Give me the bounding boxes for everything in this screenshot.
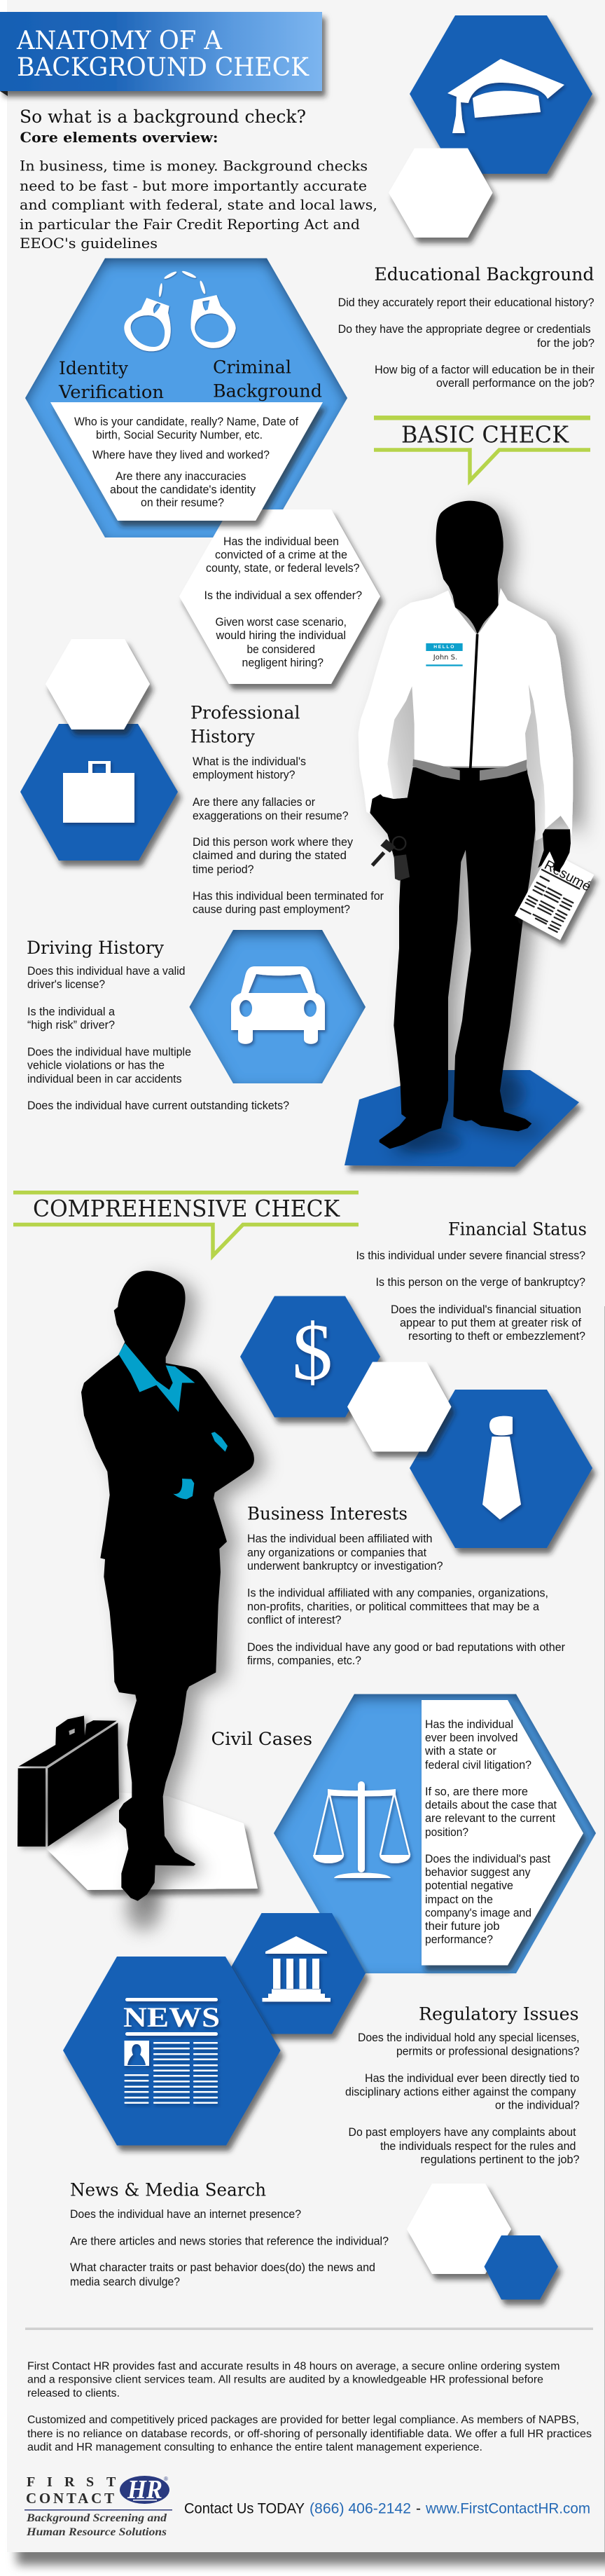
text block: company description: there is no reliance on database records, or off-shoring of personally identifiable data. We offer a full HR practices [27, 2428, 592, 2440]
panel: identity questions: on their resume? [141, 496, 224, 509]
text block: civil cases questions: company's image and [425, 1907, 531, 1919]
text block: civil cases questions: performance? [425, 1933, 493, 1946]
panel: driving history [27, 938, 289, 1112]
panel: civil cases: Civil Cases [211, 1729, 312, 1749]
silhouette body [359, 501, 573, 1149]
blue collar and cuffs [118, 1343, 228, 1499]
text block: company description [27, 2360, 592, 2453]
panel: business interests: Is the individual affiliated with any companies, organizations, [247, 1587, 548, 1599]
panel: business interests: firms, companies, etc.? [247, 1654, 361, 1667]
hand [538, 829, 571, 871]
panel: business interests: non-profits, charities, or political committees that may be a [247, 1601, 540, 1613]
heading: criminal background [213, 357, 322, 401]
contact line [184, 2500, 590, 2517]
text block: company description: and a responsive client services team. All results are audited by a knowledgeable HR professional before [27, 2374, 543, 2385]
contact line: www.FirstContactHR.com [425, 2500, 590, 2517]
text block: civil cases questions [424, 1718, 557, 1946]
intro text block: and compliant with federal, state and local laws, [20, 196, 377, 213]
panel: regulatory issues: or the individual? [495, 2099, 580, 2112]
text block: criminal questions: would hiring the individual [216, 629, 346, 642]
panel: driving history: “high risk” driver? [27, 1019, 115, 1032]
panel: business interests: underwent bankruptcy or investigation? [247, 1560, 443, 1573]
panel: regulatory issues: Do past employers have any complaints about [349, 2126, 576, 2139]
logo: First Contact HR: Human Resource Solutions [26, 2526, 167, 2538]
foot shadow [126, 1889, 161, 1931]
panel: identity questions: about the candidate's identity [110, 484, 256, 496]
hexagon: news [63, 1957, 280, 2146]
panel: identity questions: birth, Social Security Number, etc. [96, 429, 263, 441]
panel: professional history: Has this individual been terminated for [193, 890, 384, 903]
panel: driving history: driver's license? [27, 978, 105, 991]
panel: financial status: Is this individual under severe financial stress? [356, 1249, 585, 1262]
icon: tie [482, 1416, 521, 1519]
title: BACKGROUND CHECK [17, 53, 310, 82]
figure: man silhouette [345, 501, 594, 1167]
panel: business interests: Business Interests [247, 1504, 408, 1523]
name tag: John S. [433, 654, 457, 662]
panel: regulatory issues: permits or professional designations? [396, 2045, 580, 2057]
text block: civil cases questions: potential negative [425, 1879, 513, 1892]
text block: criminal questions: Has the individual been [223, 535, 339, 548]
panel: driving history: vehicle violations or has the [27, 1060, 165, 1072]
floor hexagon [345, 1070, 579, 1167]
heading: identity verification: Verification [58, 382, 164, 402]
panel: driving history: Does this individual have a valid [27, 965, 185, 978]
contact line: Contact Us TODAY [184, 2500, 305, 2517]
panel: identity questions [50, 402, 323, 521]
panel: financial status: appear to put them at greater risk of [400, 1317, 581, 1329]
contact line: (866) 406-2142 [310, 2500, 411, 2517]
panel: driving history: Does the individual have multiple [27, 1046, 191, 1058]
text block: company description: released to clients. [27, 2387, 120, 2399]
intro text block: EEOC's guidelines [20, 235, 158, 252]
panel: financial status [356, 1219, 587, 1343]
floor hexagon white [35, 1785, 258, 1890]
briefcase [18, 1715, 119, 1847]
text block: civil cases questions: their future job [425, 1920, 500, 1933]
intro text block: Core elements overview: [20, 129, 218, 146]
contact line: - [416, 2500, 421, 2517]
panel: driving history: Is the individual a [27, 1006, 116, 1018]
icon: handcuffs [124, 270, 236, 351]
text block: civil cases questions: with a state or [424, 1745, 496, 1758]
icon: scales [313, 1781, 410, 1878]
hexagon: graduation cap [410, 15, 592, 174]
belt [412, 759, 527, 781]
panel: identity questions: Who is your candidate, really? Name, Date of [74, 416, 298, 428]
panel: financial status: Is this person on the verge of bankruptcy? [375, 1276, 585, 1289]
hexagons: white and blue lower right [407, 2184, 558, 2300]
icon: newspaper: NEWS [123, 2001, 220, 2033]
text block: civil cases questions: impact on the [425, 1893, 493, 1906]
text block: company description: Customized and competitively priced packages are provided for better legal compliance. As members of NAPBS, [27, 2414, 579, 2426]
resume sheet [515, 851, 594, 940]
icon: graduation cap [447, 59, 564, 133]
text block: criminal questions: county, state, or federal levels? [206, 562, 360, 575]
panel: news and media search: News & Media Search [70, 2179, 266, 2200]
text block: civil cases questions: are relevant to the current [425, 1812, 555, 1825]
callout: comprehensive check [13, 1191, 359, 1256]
resume sheet: Résumé [542, 858, 593, 895]
heading: criminal background: Background [213, 381, 322, 401]
panel: criminal questions hexagon [179, 509, 380, 684]
panel: driving history: Does the individual have current outstanding tickets? [27, 1099, 289, 1112]
intro text block: In business, time is money. Background checks [20, 157, 368, 174]
silhouette body [81, 1270, 254, 1901]
panel: regulatory issues: Regulatory Issues [419, 2004, 578, 2024]
panel: identity and criminal hexagon [25, 258, 347, 537]
icon: dollar: $ [292, 1308, 333, 1397]
panel: driving history: Driving History [27, 938, 165, 958]
logo: First Contact HR: HR [127, 2475, 162, 2505]
text block: criminal questions: negligent hiring? [242, 657, 324, 669]
heading: criminal background: Criminal [213, 357, 291, 377]
hexagons: dollar, tie and white connector [240, 1296, 592, 1548]
panel: professional history: claimed and during the stated [193, 849, 347, 862]
logo: First Contact HR: FIRST [27, 2474, 116, 2490]
panel: educational background: How big of a factor will education be in their [375, 364, 594, 376]
panel: regulatory issues: disciplinary actions either against the company [345, 2085, 576, 2098]
panel: news and media search: Are there articles and news stories that reference the individual? [70, 2235, 389, 2248]
panel: financial status: resorting to theft or embezzlement? [408, 1330, 585, 1343]
intro text block [20, 107, 377, 252]
callout: comprehensive check: COMPREHENSIVE CHECK [33, 1195, 340, 1222]
text block: company description: First Contact HR provides fast and accurate results in 48 hours on average, a secure online ordering system [27, 2360, 560, 2373]
logo: First Contact HR: Background Screening and [26, 2512, 167, 2524]
panel: regulatory issues: Does the individual hold any special licenses, [358, 2032, 580, 2044]
title: ANATOMY OF A [16, 27, 223, 55]
heading: identity verification [58, 358, 164, 402]
text block: civil cases questions: federal civil litigation? [425, 1759, 531, 1772]
text block: civil cases questions: position? [425, 1826, 468, 1839]
panel: business interests [247, 1504, 565, 1667]
panel: professional history: Are there any fallacies or [193, 796, 315, 809]
panel: identity questions: Are there any inaccuracies [116, 470, 246, 483]
panel: educational background: Do they have the appropriate degree or credentials [338, 323, 591, 336]
panel: professional history: exaggerations on their resume? [193, 810, 349, 823]
text block: criminal questions [204, 535, 362, 669]
zipper [471, 634, 478, 769]
panel: news and media search: media search divulge? [70, 2276, 180, 2289]
panel: professional history: What is the individual's [193, 755, 306, 768]
text block: criminal questions: be considered [246, 643, 315, 656]
intro text block: in particular the Fair Credit Reporting Act and [20, 216, 360, 233]
white hexagon upper right [389, 149, 493, 238]
panel: identity questions: Where have they lived and worked? [92, 448, 270, 461]
title banner [0, 12, 322, 96]
icon: newspaper [123, 1998, 220, 2104]
keys [373, 837, 410, 881]
logo: First Contact HR: ® [164, 2476, 168, 2482]
logo: First Contact HR [25, 2474, 172, 2538]
panel: regulatory issues: regulations pertinent to the job? [420, 2153, 580, 2166]
text block: civil cases questions: Has the individual [425, 1718, 513, 1731]
figure: woman silhouette [18, 1270, 258, 1931]
text block: civil cases questions: Does the individual's past [425, 1853, 550, 1865]
icon: car [231, 966, 325, 1044]
panel: educational background [338, 264, 594, 390]
divider [25, 2328, 593, 2330]
text block: criminal questions: Given worst case scenario, [216, 616, 347, 629]
panel: educational background: Did they accurately report their educational history? [338, 296, 594, 309]
panel: educational background: Educational Background [374, 264, 594, 285]
text block: company description: audit and HR management consulting to enhance the entire talent management experience. [27, 2441, 482, 2453]
panel: business interests: any organizations or companies that [247, 1547, 426, 1559]
callout: basic check: BASIC CHECK [401, 420, 569, 448]
icon: bank [262, 1936, 331, 2001]
panel: business interests: Does the individual have any good or bad reputations with other [247, 1641, 565, 1654]
panel: driving history: individual been in car accidents [27, 1073, 182, 1085]
panel: regulatory issues [345, 2004, 580, 2166]
panel: news and media search: Does the individual have an internet presence? [70, 2208, 301, 2221]
panel: professional history: time period? [193, 863, 253, 876]
hexagon: car [189, 930, 366, 1083]
panel: professional history: Did this person work where they [193, 836, 354, 849]
panel: regulatory issues: the individuals respect for the rules and [380, 2140, 576, 2153]
panel: news and media search [70, 2179, 389, 2289]
panel: regulatory issues: Has the individual ever been directly tied to [365, 2072, 580, 2085]
name tag: HELLO [433, 645, 455, 650]
panel: civil cases [211, 1694, 596, 1973]
text block: criminal questions: convicted of a crime at the [215, 549, 347, 561]
panel: business interests: Has the individual been affiliated with [247, 1533, 433, 1545]
panel: educational background: for the job? [537, 337, 594, 350]
panel: financial status: Financial Status [448, 1219, 587, 1239]
intro text block: So what is a background check? [20, 107, 306, 127]
text block: criminal questions: Is the individual a sex offender? [204, 589, 362, 602]
panel: educational background: overall performance on the job? [436, 377, 594, 390]
hexagon: bank [228, 1913, 366, 2034]
arm gap right [525, 685, 545, 841]
panel: financial status: Does the individual's financial situation [391, 1303, 581, 1316]
arm gap left [387, 686, 415, 799]
panel: professional history [190, 702, 384, 916]
title [16, 27, 310, 82]
panel: professional history: History [190, 726, 256, 747]
intro text block: need to be fast - but more importantly accurate [20, 177, 367, 194]
text block: civil cases questions: If so, are there more [425, 1786, 528, 1798]
name tag [426, 643, 463, 666]
white hexagon: professional history upper [20, 639, 178, 861]
panel: business interests: conflict of interest? [247, 1614, 342, 1626]
text block: civil cases questions: behavior suggest any [425, 1866, 531, 1879]
panel: professional history: Professional [190, 702, 300, 723]
icon: briefcase [63, 761, 134, 823]
heading: identity verification: Identity [59, 358, 129, 378]
panel: news and media search: What character traits or past behavior does(do) the news and [70, 2261, 375, 2274]
panel: professional history: cause during past employment? [193, 903, 350, 916]
callout: basic check [374, 416, 590, 481]
text block: civil cases questions: ever been involved [425, 1732, 518, 1744]
panel: professional history: employment history? [193, 769, 295, 781]
logo: First Contact HR: CONTACT [26, 2490, 114, 2507]
text block: civil cases questions: details about the case that [425, 1799, 557, 1811]
